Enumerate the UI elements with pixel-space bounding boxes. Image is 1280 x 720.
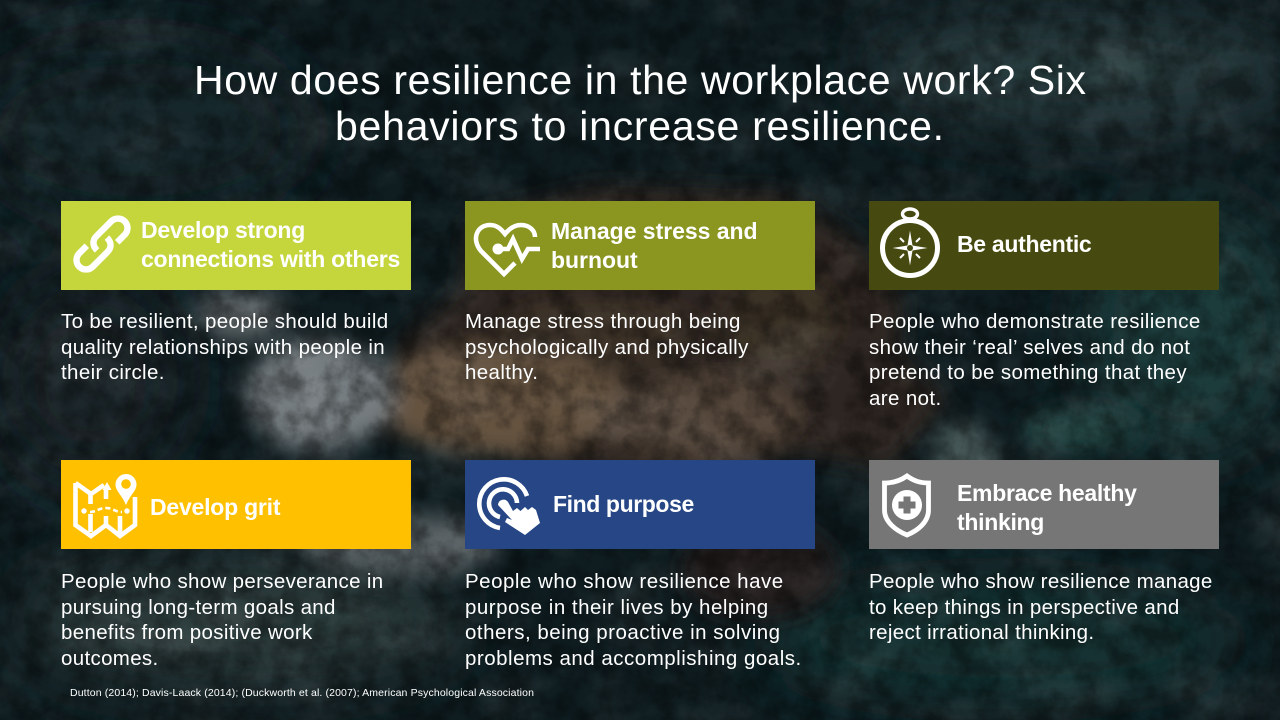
icon: chain link (73, 215, 131, 273)
text: grit description (61, 570, 383, 670)
panel: develop grit header: Develop grit (150, 494, 280, 520)
panel: embrace healthy thinking header: Embrace healthy (957, 480, 1137, 506)
panel: manage stress header (465, 201, 815, 290)
text: stress description: psychologically and physically (465, 336, 749, 359)
panel: manage stress header: Manage stress and (551, 218, 758, 244)
text: authentic description: are not. (869, 387, 942, 410)
icon: touch target (476, 477, 540, 535)
text: grit description: People who show perseverance in (61, 570, 383, 593)
text: authentic description (869, 310, 1201, 410)
icon: compass (880, 207, 940, 278)
title: behaviors to increase resilience. (335, 103, 945, 149)
panel: develop strong connections header: connections with others (141, 246, 400, 272)
text: grit description: pursuing long-term goals and (61, 596, 336, 619)
text: stress description (465, 310, 749, 384)
panel: develop strong connections header (61, 201, 411, 290)
icon: map with pin (73, 474, 138, 539)
text: authentic description: pretend to be something that they (869, 361, 1187, 384)
text: connections description: their circle. (61, 361, 165, 384)
text: healthy thinking description: to keep things in perspective and (869, 596, 1180, 619)
text: purpose description: others, being proactive in solving (465, 621, 781, 644)
text: grit description: benefits from positive work (61, 621, 313, 644)
text: purpose description: purpose in their lives by helping (465, 596, 769, 619)
text: connections description: quality relationships with people in (61, 336, 385, 359)
panel: be authentic header (869, 201, 1219, 290)
panel: manage stress header: burnout (551, 247, 638, 273)
text: healthy thinking description: reject irrational thinking. (869, 621, 1094, 644)
text: authentic description: People who demonstrate resilience (869, 310, 1201, 333)
panel: be authentic header: Be authentic (957, 231, 1091, 257)
panel: find purpose header (465, 460, 815, 549)
source citation: Dutton (2014); Davis-Laack (2014); (Duckworth et al. (2007); American Psychological Association (70, 687, 534, 699)
text: authentic description: show their ‘real’ selves and do not (869, 336, 1190, 359)
text: healthy thinking description: People who show resilience manage (869, 570, 1213, 593)
text: connections description: To be resilient, people should build (61, 310, 389, 333)
panel: embrace healthy thinking header (869, 460, 1219, 549)
text: stress description: healthy. (465, 361, 538, 384)
title (194, 57, 1087, 149)
panel: develop strong connections header: Develop strong (141, 217, 305, 243)
panel: embrace healthy thinking header: thinking (957, 509, 1044, 535)
icon: heart with pulse (474, 222, 540, 278)
text: purpose description: People who show resilience have (465, 570, 784, 593)
text: stress description: Manage stress through being (465, 310, 741, 333)
panel: find purpose header: Find purpose (553, 491, 694, 517)
text: grit description: outcomes. (61, 647, 159, 670)
icon: shield with cross (882, 473, 931, 538)
title: How does resilience in the workplace work? Six (194, 57, 1087, 103)
text: purpose description (465, 570, 802, 670)
panel: develop grit header (61, 460, 411, 549)
text: connections description (61, 310, 389, 384)
text: healthy thinking description (869, 570, 1213, 644)
text: purpose description: problems and accomplishing goals. (465, 647, 802, 670)
